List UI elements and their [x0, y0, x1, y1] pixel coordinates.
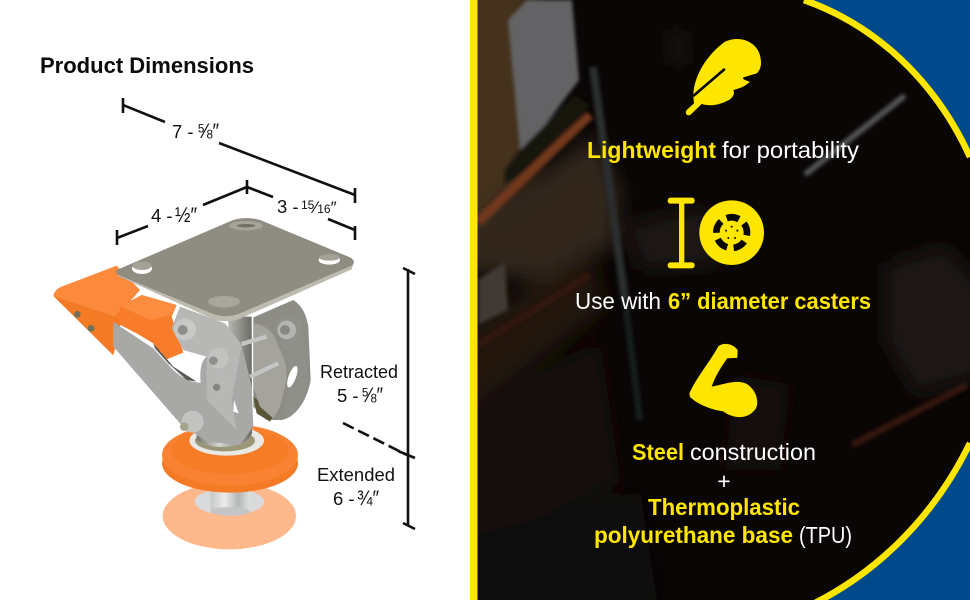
label: retracted height	[320, 361, 398, 407]
label: retracted height: Retracted	[320, 361, 398, 382]
text: steel plus thermoplastic polyurethane base: Thermoplastic	[648, 494, 800, 520]
text: lightweight for portability: for portability	[722, 137, 860, 163]
text: steel plus thermoplastic polyurethane base: +	[717, 468, 731, 494]
label: retracted height: ⅝″	[361, 384, 383, 407]
text: steel plus thermoplastic polyurethane base: (TPU)	[799, 522, 852, 548]
connecting rods	[242, 337, 278, 377]
dimension: width 4-1/2: ½″	[175, 204, 197, 227]
icon: feather	[686, 39, 761, 115]
dimension: overall length 7-5/8	[123, 98, 355, 203]
label: retracted height: 5 -	[337, 385, 359, 406]
text: lightweight for portability	[587, 137, 860, 163]
dimension: width 4-1/2: 4 -	[151, 205, 173, 226]
panel: blue corner background	[477, 0, 970, 600]
bolts	[174, 318, 231, 433]
text: steel plus thermoplastic polyurethane base	[594, 439, 852, 548]
label: extended height: ¾″	[357, 487, 379, 510]
yellow curved border	[804, 0, 970, 600]
rear latch plate	[253, 300, 311, 420]
dimension: overall length 7-5/8: ⅝″	[197, 120, 219, 143]
top mounting plate	[116, 218, 354, 321]
dimension: depth 3-15/16: 3 -	[277, 196, 299, 217]
dimension: height bar with retracted and extended markers	[343, 268, 415, 529]
steel bracket	[113, 307, 253, 445]
dimension: overall length 7-5/8: 7 -	[172, 121, 194, 142]
dimension: depth 3-15/16: 16″	[317, 198, 337, 217]
panel: dark warehouse photo	[460, 0, 970, 600]
icon: diameter bar and wheel	[668, 198, 764, 268]
text: use with 6 inch diameter casters: 6” diameter casters	[668, 288, 871, 314]
dimension: depth 3-15/16	[247, 187, 355, 240]
label: extended height: 6 -	[333, 488, 355, 509]
dimension: width 4-1/2	[117, 180, 247, 245]
product image: floor lock	[53, 218, 354, 549]
panel: white product background	[0, 0, 470, 600]
text: steel plus thermoplastic polyurethane base: polyurethane base	[594, 522, 793, 548]
extended faded base	[163, 483, 296, 549]
text: use with 6 inch diameter casters	[575, 288, 871, 314]
dimension: depth 3-15/16: ⁄	[310, 198, 320, 217]
dimension: depth 3-15/16: 15	[301, 198, 315, 212]
text: lightweight for portability: Lightweight	[587, 137, 716, 163]
orange foot pedals	[53, 266, 183, 359]
heading: Product Dimensions: Product Dimensions	[40, 53, 254, 78]
text: use with 6 inch diameter casters: Use with	[575, 288, 661, 314]
label: extended height: Extended	[317, 464, 395, 485]
yellow left strip	[470, 0, 478, 600]
text: steel plus thermoplastic polyurethane base: construction	[690, 439, 816, 465]
center column	[197, 317, 252, 447]
icon: flexed arm	[689, 344, 757, 417]
orange base	[162, 424, 298, 493]
text: steel plus thermoplastic polyurethane base: Steel	[632, 439, 684, 465]
label: extended height	[317, 464, 395, 510]
